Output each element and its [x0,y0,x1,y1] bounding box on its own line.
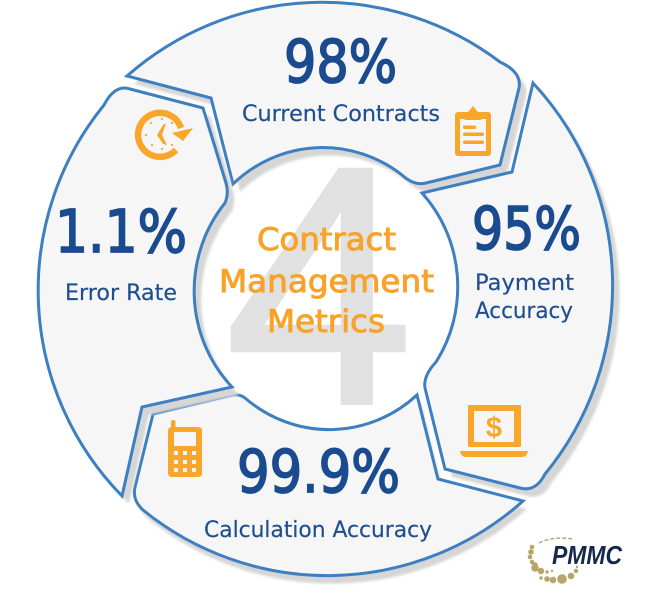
big background numeral 4: 4 [225,96,414,475]
panel: error rate [38,88,239,504]
label: error rate: Error Rate [65,280,177,306]
panel: payment accuracy [422,83,620,497]
icon: laptop with dollar [460,405,528,457]
label: payment accuracy: Accuracy [475,298,573,324]
label: payment accuracy [475,270,574,324]
center title: Contract [257,222,396,258]
logo wordmark: PMMC [552,540,623,570]
panel: calculation accuracy [134,395,527,584]
center title [219,222,434,340]
center title: Metrics [267,304,385,340]
stat: 95%: 95% [472,194,581,263]
stat: 1.1%: 1.1% [55,197,187,266]
panel: current contracts [127,2,526,192]
label: calculation accuracy: Calculation Accuracy [204,517,432,543]
icon: laptop with dollar: $ [486,412,502,444]
label: current contracts: Current Contracts [242,101,440,127]
stat: 99.9%: 99.9% [237,437,400,506]
icon: clock with arrow [138,113,193,157]
center title: Management [219,264,434,300]
stat: 98%: 98% [284,27,397,96]
icon: clipboard [455,106,491,156]
label: payment accuracy: Payment [475,270,574,296]
logo: PMMC [528,538,623,584]
icon: mobile phone [168,420,202,477]
